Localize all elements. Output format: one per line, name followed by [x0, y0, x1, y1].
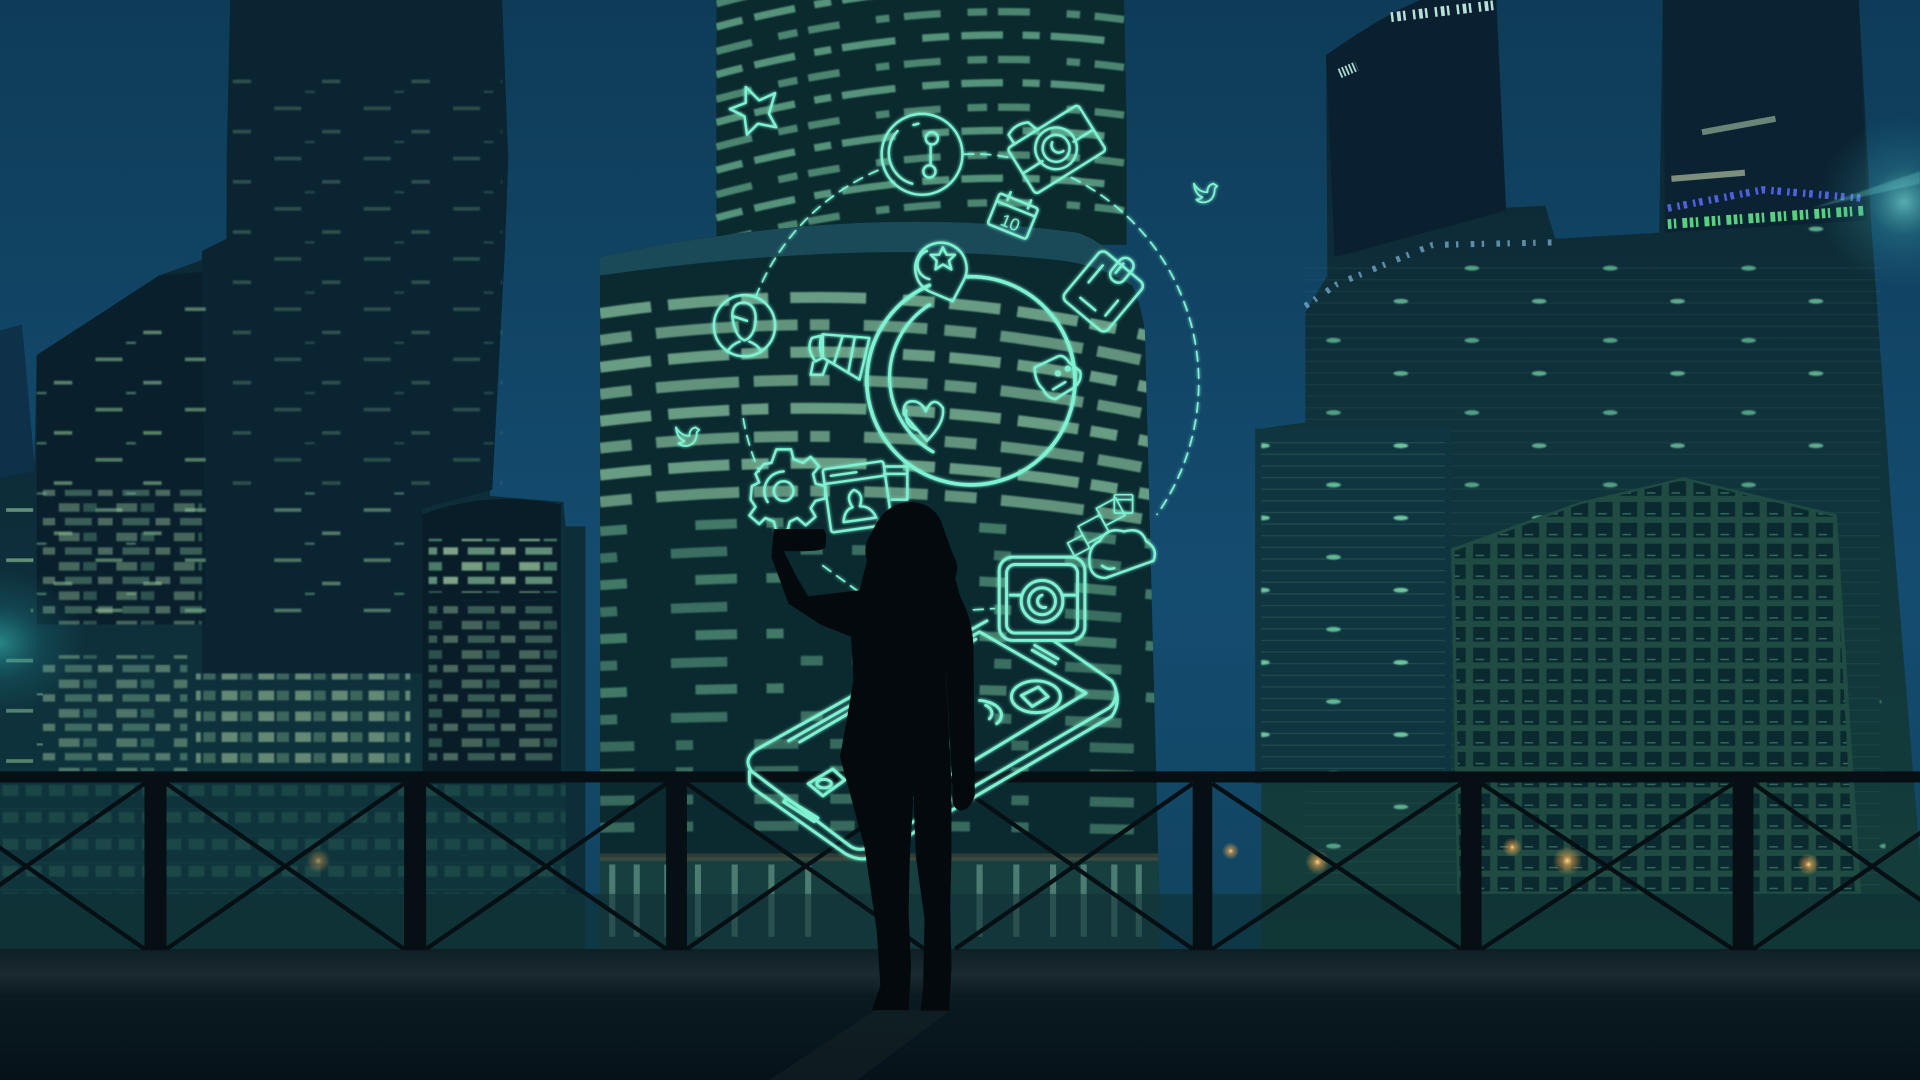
icon: star: [730, 87, 776, 135]
icon: cloud: [1089, 530, 1155, 578]
railing fence: [0, 771, 1920, 950]
icon: smartphone isometric: [748, 621, 1117, 859]
icon: heart: [904, 401, 943, 441]
icon: clipboard: [1061, 241, 1152, 334]
dashed orbit: [743, 154, 1199, 610]
holographic icons: [676, 87, 1217, 859]
skyline: central front tower with curved window rows: [598, 220, 1163, 955]
icon: user circle: [714, 295, 775, 356]
icon: camera: [1000, 93, 1106, 194]
front low-rise grid block: [1451, 478, 1861, 894]
main ring: [867, 277, 1075, 485]
icon: megaphone: [809, 334, 869, 380]
icon: photos: [1060, 495, 1133, 556]
left low-rise block: [1255, 429, 1451, 790]
icon: calendar: [987, 189, 1040, 240]
tower crown lights: [1305, 5, 1864, 306]
floor shadow of the woman: [769, 1010, 950, 1080]
icon: profile cards: [823, 461, 907, 533]
icon: twitter bird left: [676, 427, 699, 446]
icon: gear: [749, 449, 825, 531]
woman silhouette taking a selfie: [771, 502, 975, 1011]
skyline: right tower cluster: [1255, 0, 1920, 949]
icon: instagram: [999, 557, 1085, 640]
icon: info circle: [882, 114, 962, 195]
icon: chat bubble: [1035, 356, 1081, 399]
lens flares: [0, 116, 1920, 716]
skyline: left tower cluster: [0, 0, 585, 949]
icon: calendar: 10: [998, 210, 1023, 235]
icon: twitter bird right: [1194, 184, 1217, 202]
inner arc: [890, 305, 933, 452]
icon: map pin with star: [915, 243, 967, 301]
floor: [0, 949, 1920, 1080]
skyline: central back tower with curved window rows: [716, 0, 1127, 245]
base podium colonnade: [600, 853, 1161, 949]
street lights and traffic at the horizon: [0, 838, 1920, 949]
